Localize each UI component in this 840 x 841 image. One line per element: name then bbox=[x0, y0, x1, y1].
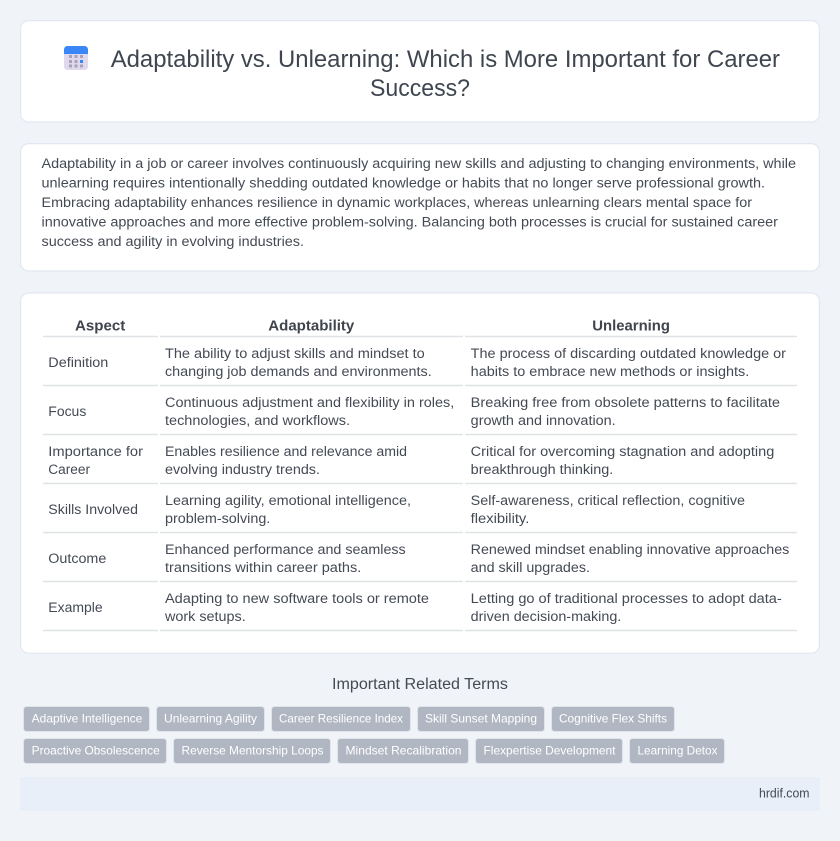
tag: Flexpertise Development bbox=[484, 744, 616, 758]
title bbox=[111, 46, 780, 102]
row: example bbox=[48, 591, 782, 625]
tag: Learning Detox bbox=[638, 744, 718, 758]
panel: comparison table bbox=[21, 293, 819, 653]
row: importance for career: Career bbox=[48, 462, 90, 478]
tag bbox=[476, 738, 622, 764]
row: outcome: and skill upgrades. bbox=[471, 560, 590, 576]
table header row: Unlearning bbox=[592, 319, 670, 335]
tag bbox=[272, 706, 410, 732]
row: definition: The ability to adjust skills and mindset to bbox=[165, 346, 425, 362]
intro text: Embracing adaptability enhances resilience in dynamic workplaces, whereas unlearning clears mental space for bbox=[42, 195, 752, 211]
tag: Adaptive Intelligence bbox=[32, 712, 143, 726]
tag: Mindset Recalibration bbox=[346, 744, 462, 758]
row: example: work setups. bbox=[164, 609, 246, 625]
table header row bbox=[75, 319, 670, 335]
row: importance for career: Importance for bbox=[48, 444, 143, 460]
tag bbox=[552, 706, 674, 732]
row: focus: Breaking free from obsolete patterns to facilitate bbox=[471, 395, 780, 411]
row: definition: Definition bbox=[48, 355, 108, 371]
row: definition: The process of discarding outdated knowledge or bbox=[471, 346, 786, 362]
row: focus bbox=[48, 395, 780, 429]
row: skills involved: Self-awareness, critical reflection, cognitive bbox=[471, 493, 745, 509]
row: definition: changing job demands and environments. bbox=[165, 364, 432, 380]
heading: important related terms: Important Related Terms bbox=[332, 676, 508, 693]
row: definition: habits to embrace new methods or insights. bbox=[471, 364, 749, 380]
row: outcome: Outcome bbox=[48, 551, 106, 567]
row: focus: growth and innovation. bbox=[471, 413, 616, 429]
tag: Skill Sunset Mapping bbox=[425, 712, 537, 726]
row: outcome: Renewed mindset enabling innovative approaches bbox=[471, 542, 789, 558]
row: outcome: transitions within career paths. bbox=[165, 560, 361, 576]
tag: Proactive Obsolescence bbox=[32, 744, 160, 758]
tag bbox=[630, 738, 724, 764]
row: example: Adapting to new software tools or remote bbox=[165, 591, 429, 607]
intro text: unlearning requires intentionally shedding outdated knowledge or habits that no longer serve professional growth. bbox=[42, 176, 765, 192]
row: skills involved: Skills Involved bbox=[48, 502, 138, 518]
row: example: Example bbox=[48, 600, 103, 616]
row: focus: Focus bbox=[48, 404, 86, 420]
panel: title card bbox=[21, 21, 819, 122]
tag bbox=[338, 738, 468, 764]
row: focus: technologies, and workflows. bbox=[165, 413, 350, 429]
intro text bbox=[42, 156, 796, 250]
table header row: Adaptability bbox=[268, 319, 354, 335]
panel: intro paragraph bbox=[21, 144, 819, 271]
row: importance for career: Critical for overcoming stagnation and adopting bbox=[471, 444, 774, 460]
row: importance for career: Enables resilience and relevance amid bbox=[165, 444, 407, 460]
tag bbox=[174, 738, 330, 764]
footer source: hrdif.com bbox=[759, 787, 810, 801]
tag bbox=[24, 738, 166, 764]
tag: Unlearning Agility bbox=[164, 712, 257, 726]
footer bar bbox=[20, 777, 820, 811]
row: skills involved: Learning agility, emotional intelligence, bbox=[165, 493, 411, 509]
row: skills involved: problem-solving. bbox=[165, 511, 270, 527]
table header row: Aspect bbox=[75, 319, 126, 335]
row: importance for career: breakthrough thinking. bbox=[471, 462, 613, 478]
row: skills involved bbox=[48, 493, 745, 527]
row: example: Letting go of traditional processes to adopt data- bbox=[471, 591, 782, 607]
row: outcome: Enhanced performance and seamless bbox=[165, 542, 406, 558]
tag: Cognitive Flex Shifts bbox=[559, 712, 667, 726]
row: skills involved: flexibility. bbox=[471, 511, 529, 527]
title: Success? bbox=[370, 75, 470, 102]
tag: Reverse Mentorship Loops bbox=[182, 744, 324, 758]
row: importance for career bbox=[48, 444, 774, 478]
tag bbox=[156, 706, 264, 732]
row: importance for career: evolving industry trends. bbox=[165, 462, 320, 478]
row: outcome bbox=[48, 542, 789, 576]
tag bbox=[418, 706, 544, 732]
related terms tags bbox=[24, 706, 724, 764]
icon: calendar bbox=[64, 46, 88, 70]
intro text: innovative approaches and more effective problem-solving. Balancing both processes is crucial for sustained career bbox=[42, 214, 778, 230]
row: focus: Continuous adjustment and flexibility in roles, bbox=[165, 395, 454, 411]
row: example: driven decision-making. bbox=[471, 609, 621, 625]
intro text: success and agility in evolving industries. bbox=[42, 234, 304, 250]
tag: Career Resilience Index bbox=[279, 712, 403, 726]
title: Adaptability vs. Unlearning: Which is More Important for Career bbox=[111, 46, 780, 73]
tag bbox=[24, 706, 150, 732]
row: definition bbox=[48, 346, 786, 380]
intro text: Adaptability in a job or career involves continuously acquiring new skills and adjusting to changing environments, while bbox=[42, 156, 796, 172]
